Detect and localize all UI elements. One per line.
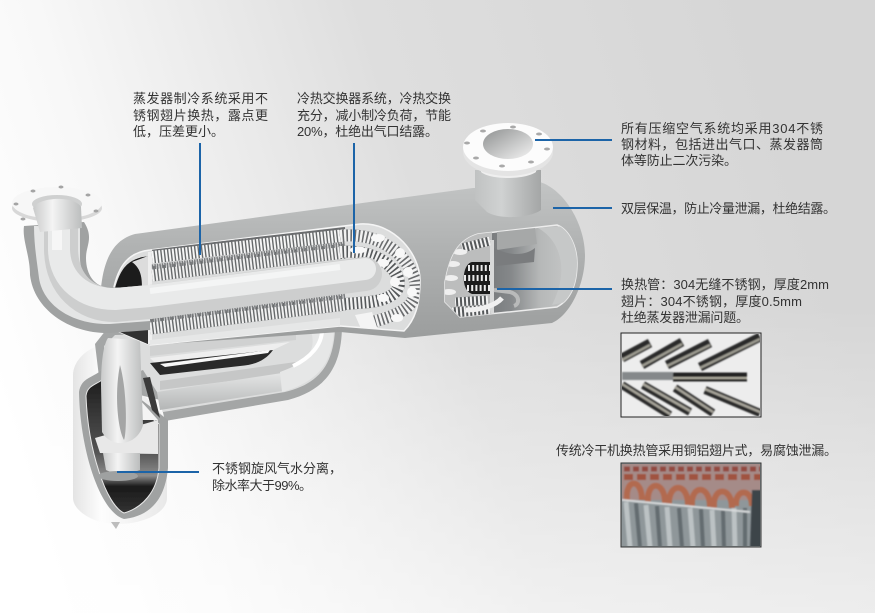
right cutaway window <box>442 225 580 320</box>
leader lines <box>117 140 612 472</box>
finned tube row 2 <box>152 244 345 274</box>
lower duct <box>95 325 342 421</box>
text: cyclone separator <box>212 461 342 493</box>
text: evaporator refrigeration system: 蒸发器制冷系统采用不 <box>133 91 268 106</box>
photo: copper aluminium fin coil <box>620 462 762 548</box>
inlet pipe with flange <box>12 186 365 333</box>
finned tube row 1 <box>152 228 345 257</box>
text: heat exchange tube <box>621 277 829 325</box>
text: cyclone separator: 不锈钢旋风气水分离， <box>212 461 342 476</box>
main shell <box>100 182 585 345</box>
text: evaporator refrigeration system <box>133 91 268 139</box>
left cutaway window <box>113 224 420 350</box>
text: heat exchanger system: 冷热交换器系统，冷热交换 <box>297 91 451 106</box>
outlet stub with flange <box>463 123 553 217</box>
text: evaporator refrigeration system: 锈钢翅片换热，露点更 <box>133 108 268 123</box>
text: heat exchanger system: 20%，杜绝出气口结露。 <box>297 124 438 139</box>
text: stainless air system: 所有压缩空气系统均采用304不锈 <box>621 121 823 136</box>
text: heat exchanger system: 充分，减小制冷负荷，节能 <box>297 108 451 123</box>
finned tube row 3 <box>150 296 345 327</box>
text: stainless air system: 体等防止二次污染。 <box>621 153 737 168</box>
photo: stainless finned tubes <box>621 333 761 417</box>
text: heat exchange tube: 换热管：304无缝不锈钢，厚度2mm <box>621 277 829 292</box>
text: evaporator refrigeration system: 低，压差更小。 <box>133 124 224 139</box>
text: stainless air system: 钢材料，包括进出气口、蒸发器筒 <box>621 137 823 152</box>
text: cyclone separator: 除水率大于99%。 <box>212 478 312 493</box>
fin blobs <box>350 234 417 322</box>
text: heat exchange tube: 杜绝蒸发器泄漏问题。 <box>621 310 749 325</box>
text: heat exchange tube: 翅片：304不锈钢，厚度0.5mm <box>621 294 802 309</box>
vessel outer skin <box>73 346 167 524</box>
heat exchanger illustration <box>12 123 585 529</box>
cyclone separator vessel <box>79 338 168 529</box>
text: stainless air system <box>621 121 823 168</box>
text: heat exchanger system <box>297 91 451 139</box>
text: traditional dryer tube caption: 传统冷干机换热管采用铜铝翅片式，易腐蚀泄漏。 <box>556 443 837 458</box>
U-bend fins <box>340 235 416 322</box>
text: double insulation: 双层保温，防止冷量泄漏，杜绝结露。 <box>621 201 836 216</box>
